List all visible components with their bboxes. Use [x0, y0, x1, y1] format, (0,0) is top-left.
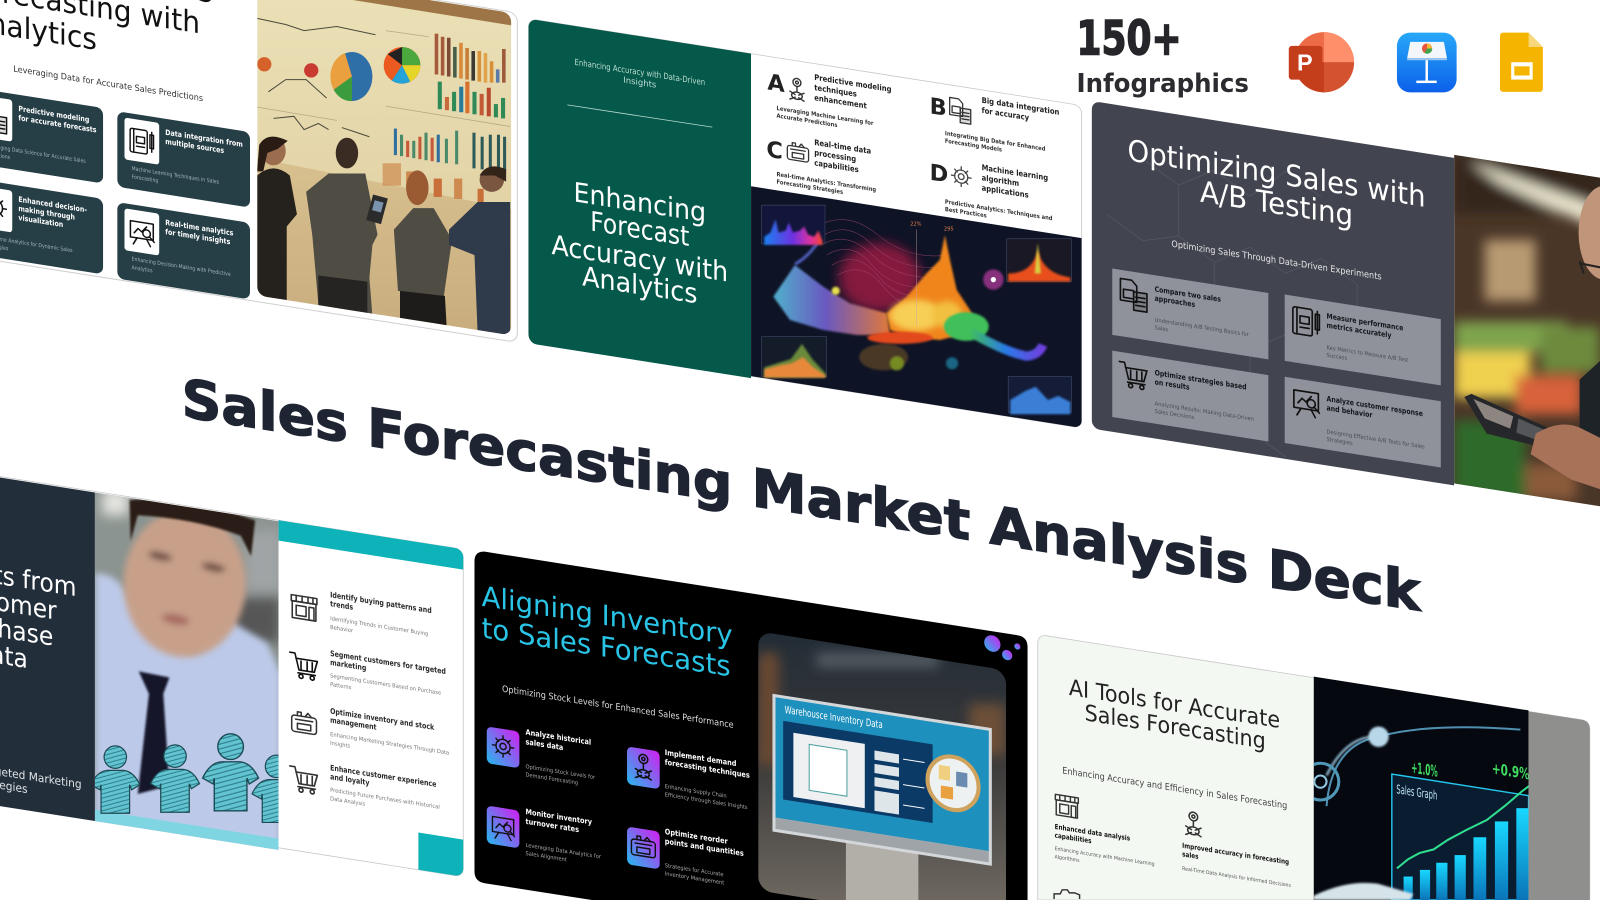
- tile: enhanced decision making: Enhanced decision-: [18, 195, 87, 215]
- item: buying patterns: [291, 583, 432, 647]
- tile: real-time analytics: [117, 202, 250, 299]
- item: customer experience: Enhance customer experience: [330, 763, 437, 789]
- heading: Optimizing Sales with: [1128, 133, 1426, 215]
- person 4: [449, 166, 510, 337]
- heading: Sales Forecasting: [1085, 700, 1266, 755]
- box: optimize: Optimize strategies based: [1155, 369, 1247, 392]
- graph panel: [1392, 774, 1529, 900]
- tile: real-time analytics: for timely insights: [165, 228, 230, 246]
- kicker text: Enhancing Accuracy with Data-Driven: [574, 58, 705, 88]
- card content: [482, 555, 1020, 900]
- item C: capabilities: [814, 158, 859, 175]
- face: [123, 510, 246, 657]
- black card background: [474, 552, 1028, 900]
- item: historical data: Demand Forecasting: [526, 772, 578, 787]
- item: segment customers: Patterns: [330, 682, 351, 691]
- tile: data integration: Forecasting: [132, 174, 158, 185]
- box: compare: Sales: [1155, 325, 1168, 333]
- item: segment customers: Segment customers for targeted: [330, 648, 446, 676]
- title: Sales Forecasting Market Analysis Deck: [182, 367, 1422, 624]
- dark lower terrain: [859, 344, 908, 370]
- item B: for accuracy: [982, 105, 1029, 123]
- chart: pie 2: [384, 47, 420, 84]
- orange mountain: [887, 235, 980, 340]
- card background: [1038, 636, 1590, 900]
- box: compare: Compare two sales: [1155, 285, 1221, 304]
- item: forecasting accuracy: Real-Time Data Analysis for Informed Decisions: [1182, 866, 1291, 889]
- shirt: [95, 573, 281, 867]
- teal corner block: [418, 833, 463, 877]
- chart: line charts: [257, 18, 510, 137]
- tile: data integration: [117, 111, 250, 208]
- photo: man with figure drawings: [95, 492, 279, 850]
- icon: PowerPoint: P: [1297, 49, 1313, 75]
- item B: Integrating Big Data for Enhanced: [945, 131, 1045, 153]
- box: optimize: Analyzing Results: Making Data-Driven: [1155, 401, 1254, 423]
- item A: enhancement: [814, 93, 867, 111]
- item: customer experience: Predicting Future Purchases with Historical: [330, 787, 440, 811]
- chart: pie 1: [330, 52, 372, 101]
- photo: business team at chart wall: [257, 0, 512, 347]
- person 1: [257, 137, 297, 300]
- item: inventory turnover: Leveraging Data Analytics for: [526, 843, 602, 861]
- item: buying patterns: trends: [330, 599, 353, 612]
- photo: sales graph and AI robot: [1302, 673, 1530, 900]
- tile: predictive modeling: for accurate forecasts: [18, 114, 97, 135]
- item: customer experience: and loyalty: [330, 772, 370, 788]
- icon: gear: [0, 185, 12, 233]
- magnifier badge: [928, 753, 979, 814]
- wave ribbon: [773, 265, 890, 335]
- item D: Best Practices: [945, 207, 987, 220]
- grey right strip: [1529, 711, 1590, 900]
- glowing arc: [1302, 727, 1520, 806]
- tile: real-time analytics: Enhancing Decision-Making with Predictive: [132, 256, 231, 278]
- person 2: [306, 138, 388, 318]
- tile: enhanced decision making: [0, 178, 103, 274]
- item: segment customers: [290, 642, 446, 706]
- teal sketched figures: [91, 734, 301, 822]
- stat: 150+ infographics: [1077, 12, 1249, 99]
- item B: B: [930, 93, 947, 122]
- peak labels: 22%: [910, 222, 922, 228]
- tile: real-time analytics: Analytics: [132, 265, 153, 275]
- screen title: Warehousce Inventory Data: [785, 704, 883, 731]
- graph labels: +0.9%: [1492, 760, 1530, 783]
- heading: Aligning Inventory: [482, 580, 733, 652]
- item: data analysis: Enhancing Accuracy with Machine Learning: [1055, 846, 1155, 868]
- box: measure: Measure performance: [1327, 312, 1404, 333]
- item: historical data: sales data: [526, 737, 563, 752]
- red glow: [839, 243, 920, 312]
- subtitle: Enhancing Accuracy and Efficiency in Sales Forecasting: [1062, 765, 1287, 812]
- green side panel: [529, 19, 1059, 427]
- item: buying patterns: Behavior: [330, 625, 354, 635]
- heading: A/B Testing: [1200, 175, 1353, 234]
- heading: to Sales Forecasts: [482, 612, 731, 683]
- item: data analysis: [1055, 794, 1155, 876]
- item: historical data: [487, 721, 596, 790]
- decorative dots: [984, 634, 1020, 662]
- graph label: Sales Graph: [1396, 782, 1437, 803]
- box: measure: [1285, 295, 1441, 385]
- item B: Forecasting Models: [945, 138, 1003, 154]
- box: measure: metrics accurately: [1327, 321, 1392, 340]
- item C: [766, 130, 876, 201]
- analyst head: [1579, 186, 1600, 280]
- chart: bars lower: [394, 129, 506, 173]
- graph labels: [1396, 745, 1530, 817]
- item: data analysis: Enhanced data analysis: [1055, 822, 1130, 843]
- red lower band: [867, 332, 933, 344]
- strand rising to chart: [793, 244, 820, 266]
- item: reorder points: [627, 821, 744, 890]
- item: inventory turnover: Sales Alignment: [526, 851, 567, 864]
- item: forecasting accuracy: Improved accuracy in forecasting: [1182, 841, 1289, 867]
- panel: card aligning inventory: [474, 552, 1028, 900]
- left panel and list: [0, 465, 463, 879]
- icon: notebook and pen: [124, 118, 159, 165]
- heading: Accuracy with: [552, 230, 728, 289]
- box: measure: Key Metrics to Measure A/B Test: [1327, 345, 1408, 364]
- item: demand forecasting: Efficiency through Sales Insights: [665, 792, 748, 811]
- item C: Forecasting Strategies: [777, 179, 844, 196]
- item A: Leveraging Machine Learning for: [777, 106, 874, 127]
- analyst jacket: [1580, 361, 1600, 438]
- item: reorder points: Strategies for Accurate: [665, 863, 724, 879]
- tie: [138, 671, 169, 794]
- item: demand forecasting: Implement demand: [665, 747, 736, 768]
- item C: processing: [814, 148, 856, 164]
- item: data analysis: capabilities: [1055, 831, 1092, 846]
- item A: techniques: [814, 83, 857, 99]
- tile: data integration: Data integration from: [165, 128, 243, 149]
- panel content: [1092, 101, 1454, 485]
- box: compare: [1112, 268, 1268, 359]
- item: customer experience: Data Analysis: [330, 796, 365, 808]
- yellow core: [890, 300, 962, 331]
- item: forecasting accuracy: [1182, 810, 1291, 889]
- tile: enhanced decision making: making through: [18, 204, 75, 222]
- chart: bars top: [435, 34, 506, 83]
- icon: dashboard: [124, 208, 159, 256]
- person 3: [394, 170, 452, 332]
- box: analyze: Analyze customer response: [1327, 395, 1423, 418]
- teal top bar: [279, 520, 463, 570]
- item: reorder points: points and quantities: [665, 836, 744, 858]
- hair: [130, 499, 255, 556]
- mini chart top left: [762, 205, 825, 245]
- calculator: [1464, 394, 1548, 445]
- box: optimize: on results: [1155, 378, 1190, 392]
- item: reorder points: Inventory Management: [665, 871, 724, 887]
- item: forecasting accuracy: sales: [1182, 850, 1199, 861]
- item A: [767, 65, 891, 138]
- box: optimize: [1112, 351, 1268, 441]
- photo: warehouse monitor: [758, 622, 1008, 900]
- kicker text: Insights: [623, 76, 657, 91]
- graph labels: +1.0%: [1411, 759, 1438, 781]
- dashboard panel: [783, 721, 933, 823]
- tile: predictive modeling: [0, 87, 103, 184]
- box: compare: approaches: [1155, 294, 1195, 309]
- item: inventory: [292, 700, 449, 765]
- item: inventory: management: [330, 715, 377, 732]
- box: analyze: [1285, 377, 1441, 468]
- item: historical data: Analyze historical: [526, 727, 591, 747]
- box: measure: Success: [1327, 353, 1347, 362]
- item B: [930, 87, 1059, 163]
- card content: [1055, 673, 1291, 897]
- item: buying patterns: Identifying Trends in Customer Buying: [330, 616, 428, 638]
- item D: [930, 154, 1053, 230]
- robot car: [1313, 883, 1413, 900]
- card white background: [529, 19, 1082, 428]
- item C: C: [766, 137, 783, 165]
- card background: [0, 0, 517, 342]
- box: optimize: Sales Decisions: [1155, 409, 1194, 421]
- mini chart bottom left: [762, 337, 827, 378]
- item D: Predictive Analytics: Techniques and: [945, 199, 1053, 222]
- subtitle: Leveraging Data for Accurate Sales Predictions: [13, 65, 204, 104]
- item A: Predictive modeling: [814, 72, 891, 94]
- heading: Enhancing: [573, 177, 706, 229]
- hand: [1531, 424, 1600, 490]
- item: inventory: Enhancing Marketing Strategies Through Data: [330, 732, 449, 757]
- panel: card enhancing forecast accuracy: [529, 19, 1088, 439]
- tile: enhanced decision making: visualization: [18, 214, 63, 229]
- item: reorder points: Optimize reorder: [665, 826, 728, 846]
- item D: algorithm: [982, 173, 1019, 188]
- tile: real-time analytics: Real-time analytics: [165, 218, 233, 238]
- icon: Keynote: [1397, 33, 1457, 92]
- tile: data integration: Machine Learning Techniques in Sales: [132, 166, 219, 186]
- card white background: [0, 475, 463, 877]
- item D: D: [930, 160, 948, 189]
- photo: rainbow data landscape: [751, 186, 1082, 427]
- subtitle: Optimizing Sales Through Data-Driven Experiments: [1171, 240, 1382, 283]
- item: inventory: Optimize inventory and stock: [330, 706, 434, 732]
- panel: card AI tools: [1038, 636, 1590, 900]
- item D: Machine learning: [982, 163, 1048, 183]
- panel: card forecasting with analytics: [0, 0, 517, 347]
- panel: card customer purchase insights: [0, 465, 463, 879]
- item: demand forecasting: forecasting techniques: [665, 757, 750, 780]
- item A: Accurate Predictions: [777, 113, 838, 129]
- item: inventory: Insights: [330, 741, 350, 750]
- tile: data integration: multiple sources: [165, 137, 224, 155]
- orbs: [832, 269, 1004, 370]
- box: analyze: Strategies: [1327, 437, 1353, 447]
- item C: Real-time data: [814, 138, 871, 156]
- stat: 150+ infographics: 150+: [1077, 12, 1182, 67]
- chart: lower wall bars: [383, 163, 484, 203]
- item: segment customers: marketing: [330, 657, 366, 673]
- subtitle: Optimizing Stock Levels for Enhanced Sales Performance: [502, 685, 734, 731]
- item: inventory turnover: Monitor inventory: [526, 807, 592, 827]
- heading: Forecast: [590, 207, 690, 253]
- item: data analysis: Algorithms: [1055, 854, 1080, 864]
- item: buying patterns: Identify buying patterns and: [330, 590, 432, 615]
- mini chart top right: [1007, 239, 1071, 282]
- contour lines: [816, 220, 949, 306]
- icon: PowerPoint: [1289, 32, 1354, 92]
- heading: Analytics: [582, 261, 697, 310]
- box: analyze: and behavior: [1327, 404, 1373, 420]
- item: demand forecasting: Enhancing Supply Chain: [665, 784, 727, 800]
- green and blue tail: [944, 312, 1043, 356]
- item: third icon top: [1054, 890, 1080, 899]
- item: demand forecasting: [627, 741, 750, 812]
- item B: Big data integration: [982, 95, 1059, 117]
- stat: 150+ infographics: Infographics: [1077, 69, 1249, 99]
- mini chart bottom right: [1008, 377, 1071, 414]
- monitor screen: [772, 694, 992, 866]
- photo: grocery market analyst: [1454, 153, 1600, 510]
- box: analyze: Designing Effective A/B Tests for Sales: [1327, 429, 1425, 451]
- green trend line: [1397, 786, 1529, 868]
- monitor stand: [846, 816, 918, 900]
- item D: applications: [982, 183, 1029, 200]
- peak labels: [910, 222, 954, 230]
- item: inventory turnover: turnover rates: [526, 816, 579, 834]
- chart: bars middle: [438, 82, 505, 118]
- icon: calculator document: [0, 94, 12, 142]
- heading: AI Tools for Accurate: [1069, 675, 1280, 734]
- peak labels: 295: [944, 227, 954, 233]
- card content: [0, 0, 250, 299]
- panel: card optimizing sales with A/B testing: [1092, 101, 1600, 510]
- item: customer experience: [290, 756, 440, 820]
- reflection strip: [95, 810, 279, 852]
- item: historical data: Optimizing Stock Levels for: [526, 764, 596, 781]
- tile: predictive modeling: Predictive modeling: [18, 105, 89, 124]
- item C: Real-time Analytics: Transforming: [777, 172, 876, 194]
- box: compare: Understanding A/B Testing Basics for: [1155, 317, 1250, 339]
- item A: A: [767, 69, 785, 98]
- bars: [1404, 808, 1529, 900]
- item: inventory turnover: [487, 801, 602, 869]
- item: segment customers: Segmenting Customers Based on Purchase: [330, 673, 442, 697]
- icon: Google Slides: [1500, 33, 1543, 92]
